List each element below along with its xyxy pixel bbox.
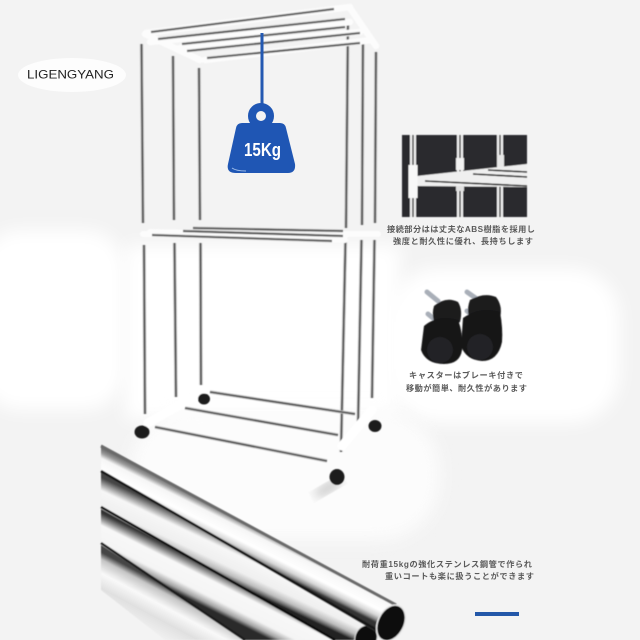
- caption: ABS connector: [387, 224, 535, 246]
- caption: stainless steel: [362, 559, 534, 581]
- weight icon: 15Kg: [228, 33, 295, 173]
- icon: four caster wheels: [421, 292, 502, 364]
- bottom connectors and rails: [148, 392, 372, 461]
- stainless steel tubes: [101, 445, 411, 640]
- weight icon: 15Kg: 15Kg: [244, 140, 281, 160]
- middle shelf rails: [143, 228, 378, 241]
- top rails: [145, 7, 376, 60]
- rack casters: [134, 394, 382, 485]
- tube 4: [101, 543, 245, 640]
- tube 1: [101, 445, 397, 633]
- tube 2: [101, 469, 383, 640]
- logo: LIGENGYANG: LIGENGYANG: [27, 68, 114, 82]
- front casters: [421, 310, 502, 364]
- tube 2 end: [351, 622, 381, 640]
- caption: stainless steel: 耐荷重15kgの強化ステンレス鋼管で作られ: [362, 559, 532, 569]
- rack posts: [142, 20, 376, 452]
- tube 3: [101, 507, 335, 640]
- caption: casters: [406, 370, 527, 393]
- tube 1 end: [371, 600, 411, 640]
- accent bar: [475, 612, 519, 616]
- caption: ABS connector: 接続部分はは丈夫なABS樹脂を採用し: [387, 224, 535, 234]
- caption: casters: キャスターはブレーキ付きで: [409, 370, 523, 380]
- detail panel: ABS connector: [402, 135, 527, 217]
- logo: LIGENGYANG: [18, 58, 126, 92]
- caption: casters: 移動が簡単、耐久性があります: [406, 383, 527, 393]
- panel posts: [410, 135, 503, 217]
- caption: stainless steel: 重いコートも楽に扱うことができます: [385, 571, 534, 581]
- caster shadow: [312, 476, 344, 500]
- caster bolts: [427, 292, 478, 323]
- panel connector: [408, 155, 527, 198]
- clothes rack frame: [134, 7, 382, 500]
- rear casters: [433, 295, 501, 332]
- caption: ABS connector: 強度と耐久性に優れ、長持ちします: [393, 236, 533, 246]
